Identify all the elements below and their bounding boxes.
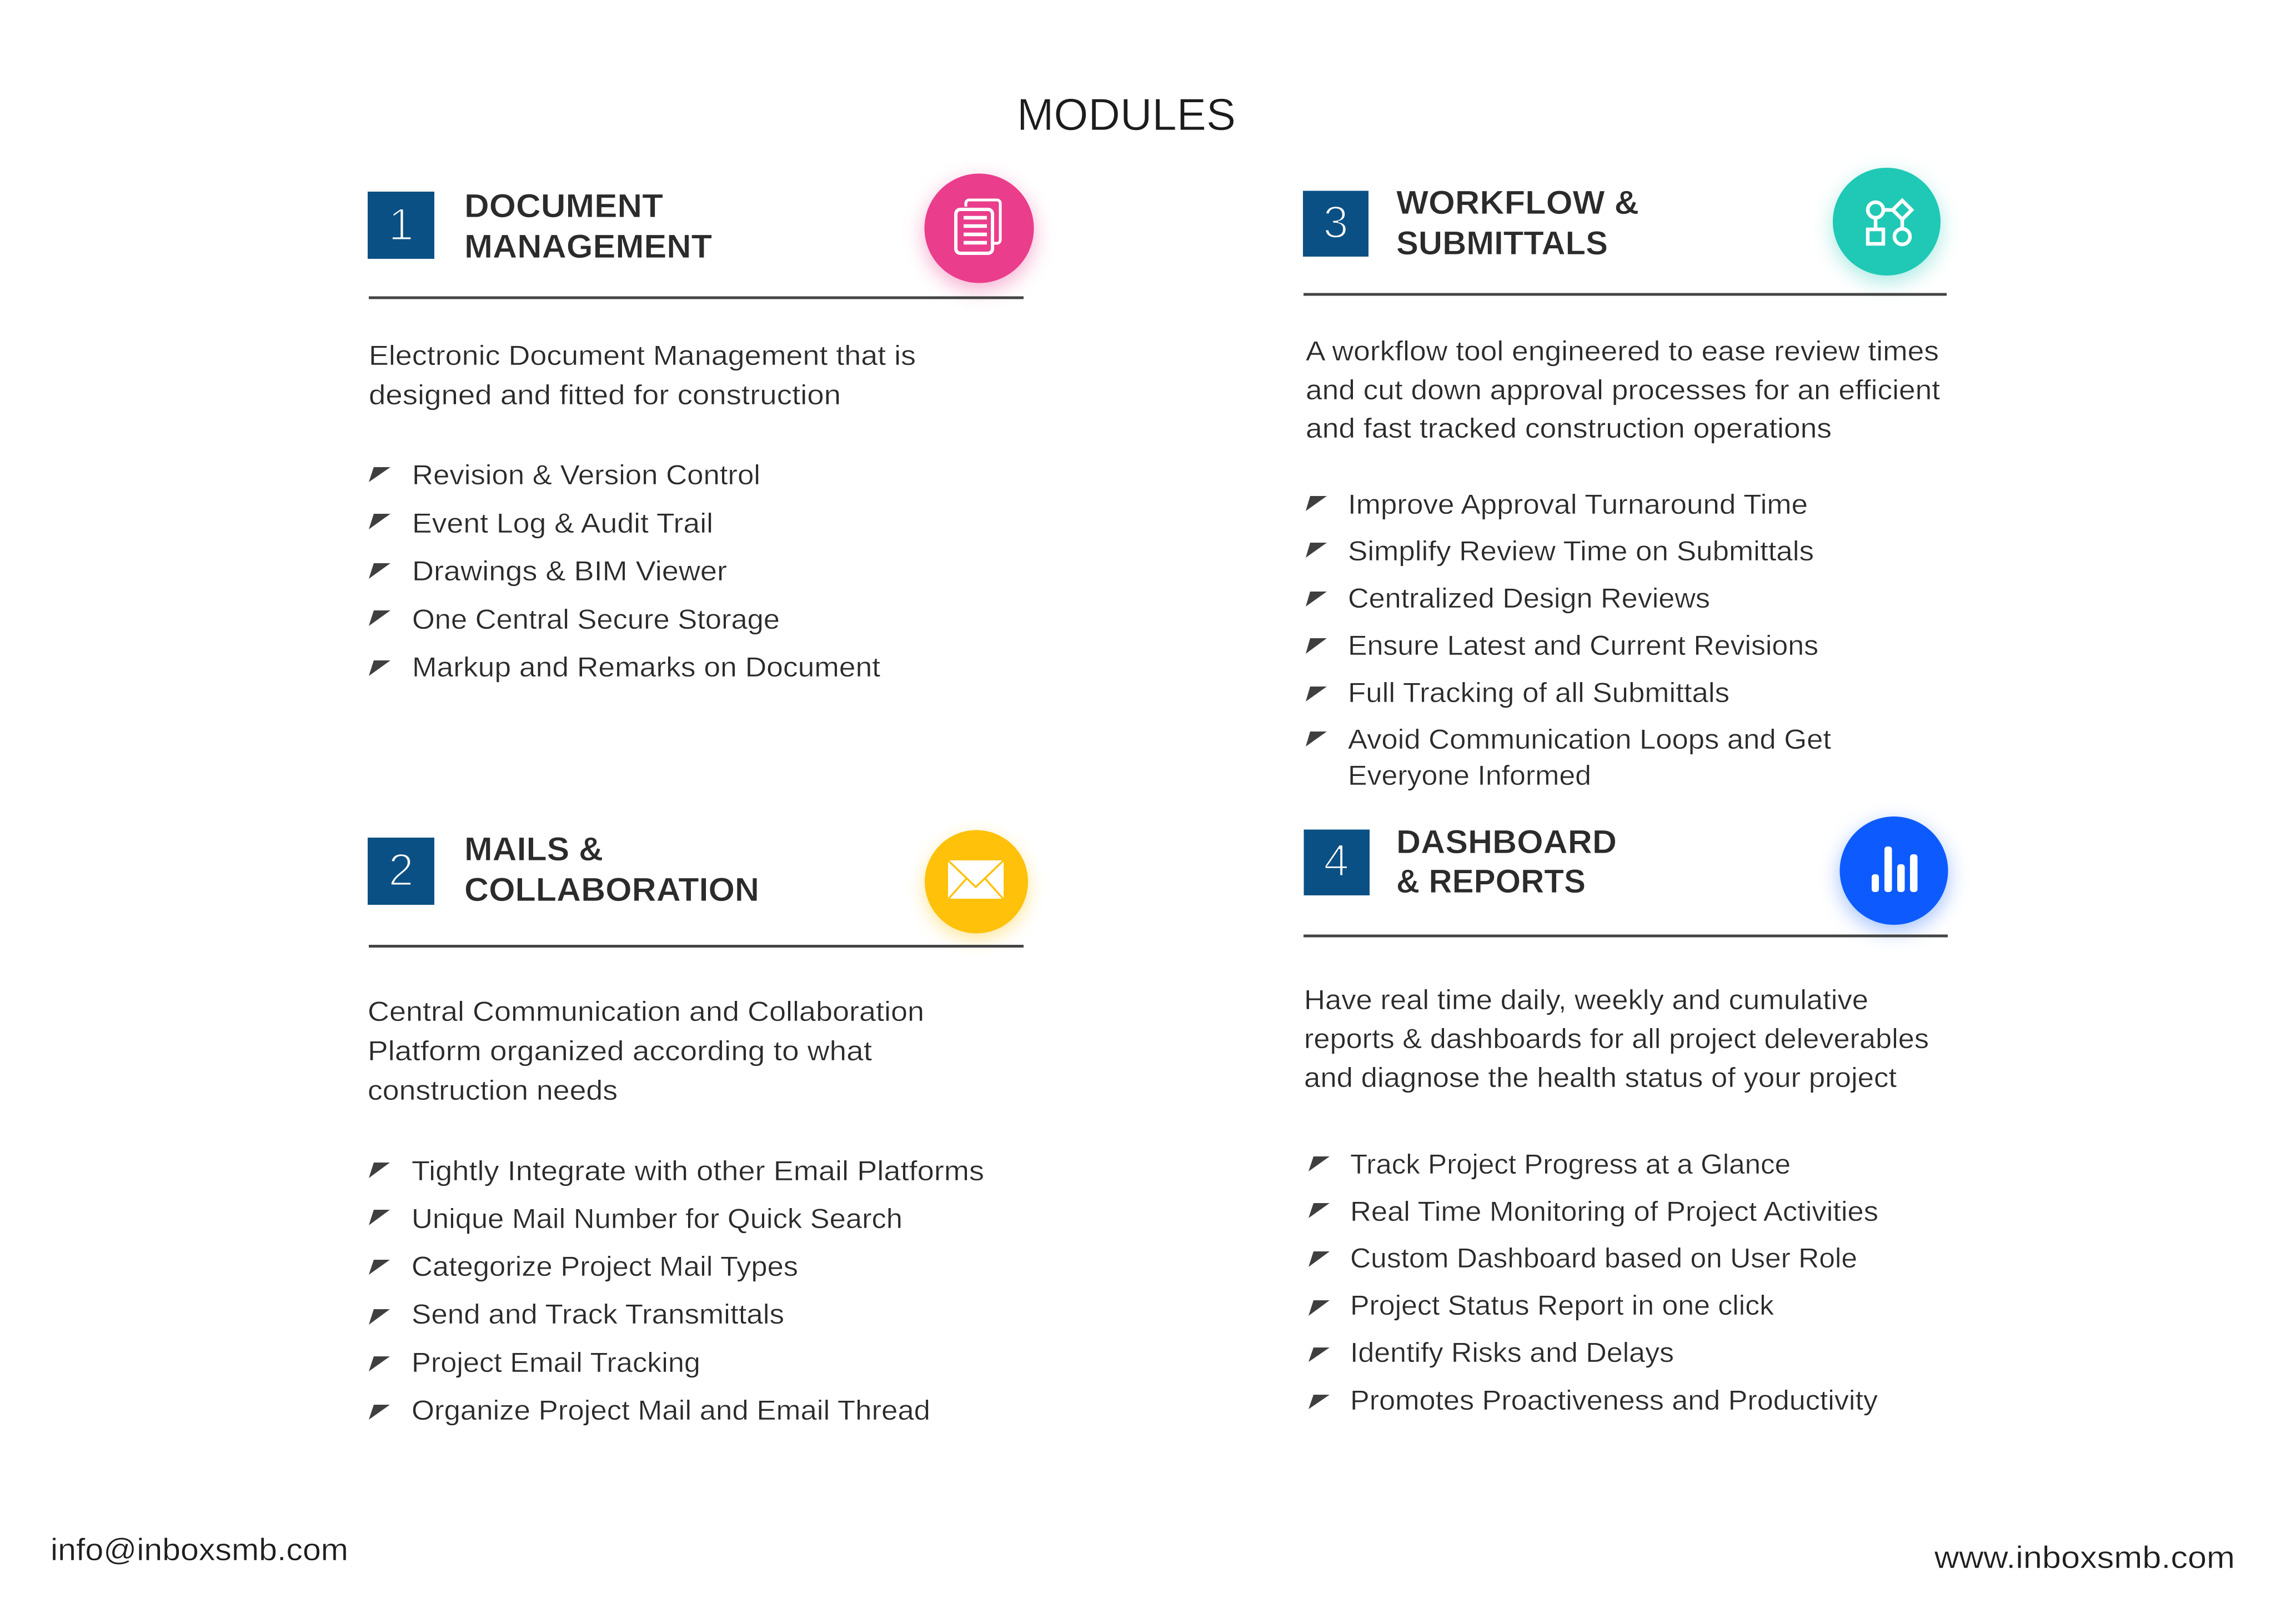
icon: documents [924,173,1034,283]
description: construction needs [368,1075,618,1106]
footer email: info@inboxsmb.com [51,1532,348,1567]
feature list: Markup and Remarks on Document [412,652,880,683]
title: MODULES [1017,90,1236,140]
description: and fast tracked construction operations [1306,413,1832,444]
description [368,996,924,1106]
number badge 3 [1303,191,1368,257]
heading: mails and collaboration: COLLABORATION [464,871,759,908]
heading: document management: MANAGEMENT [464,228,712,265]
number badge 2 [368,838,434,905]
description [369,340,916,410]
heading: workflow and submittals: SUBMITTALS [1396,224,1608,262]
footer website: www.inboxsmb.com [1934,1540,2235,1575]
description: reports & dashboards for all project deleverables [1304,1023,1929,1054]
number badge 4 [1304,830,1370,895]
description: and diagnose the health status of your project [1304,1062,1897,1093]
icon: workflow shapes [1833,168,1941,275]
feature list: Real Time Monitoring of Project Activities [1350,1196,1878,1227]
rule [1304,293,1947,295]
number badge 4: 4 [1324,835,1349,886]
number badge 2: 2 [388,845,414,895]
rule [369,297,1024,299]
description: Have real time daily, weekly and cumulative [1304,984,1868,1015]
feature list [369,1155,984,1426]
heading: document management [464,187,712,265]
feature list: One Central Secure Storage [412,604,780,635]
heading: document management: DOCUMENT [464,187,663,224]
description: designed and fitted for construction [369,379,841,410]
feature list: Ensure Latest and Current Revisions [1348,630,1818,661]
heading: dashboard and reports: & REPORTS [1396,863,1586,900]
description: and cut down approval processes for an efficient [1306,374,1940,405]
feature list: Categorize Project Mail Types [412,1251,798,1282]
rule [369,945,1024,948]
feature list [1306,489,1831,791]
icon: bar chart [1839,816,1948,925]
feature list: Send and Track Transmittals [412,1299,784,1330]
heading: dashboard and reports: DASHBOARD [1396,823,1617,860]
icon: envelope [925,830,1028,933]
number badge 1: 1 [388,199,414,250]
feature list: Revision & Version Control [412,459,760,490]
feature list: Custom Dashboard based on User Role [1350,1243,1857,1274]
panel: dashboard and reports [1304,816,1948,1416]
description [1304,984,1929,1093]
feature list: Identify Risks and Delays [1350,1337,1674,1368]
feature list: Everyone Informed [1348,760,1591,791]
number badge 1 [368,192,434,259]
feature list: Avoid Communication Loops and Get [1348,724,1831,755]
description [1306,335,1940,444]
feature list: Track Project Progress at a Glance [1350,1149,1791,1180]
panel: workflow and submittals [1303,168,1947,791]
description: Central Communication and Collaboration [368,996,924,1027]
heading: workflow and submittals: WORKFLOW & [1396,184,1639,221]
rule [1304,934,1948,938]
feature list: Tightly Integrate with other Email Platforms [412,1155,984,1186]
description: Electronic Document Management that is [369,340,916,371]
heading: mails and collaboration [464,830,759,908]
description: Platform organized according to what [368,1035,872,1066]
feature list: Project Status Report in one click [1350,1290,1774,1321]
feature list: Project Email Tracking [412,1347,700,1378]
feature list [369,459,880,683]
feature list: Simplify Review Time on Submittals [1348,535,1814,567]
feature list: Full Tracking of all Submittals [1348,677,1729,708]
feature list: Event Log & Audit Trail [412,508,713,539]
panel: document management [368,173,1034,683]
feature list: Promotes Proactiveness and Productivity [1350,1385,1878,1416]
feature list: Drawings & BIM Viewer [412,555,727,587]
feature list: Improve Approval Turnaround Time [1348,489,1808,520]
panel: mails and collaboration [368,830,1028,1426]
feature list: Centralized Design Reviews [1348,583,1710,614]
heading: mails and collaboration: MAILS & [464,830,603,868]
feature list [1309,1149,1878,1416]
heading: workflow and submittals [1396,184,1639,262]
feature list: Organize Project Mail and Email Thread [412,1395,930,1426]
number badge 3: 3 [1323,197,1348,248]
heading: dashboard and reports [1396,823,1617,900]
description: A workflow tool engineered to ease review times [1306,335,1939,367]
feature list: Unique Mail Number for Quick Search [412,1203,903,1234]
